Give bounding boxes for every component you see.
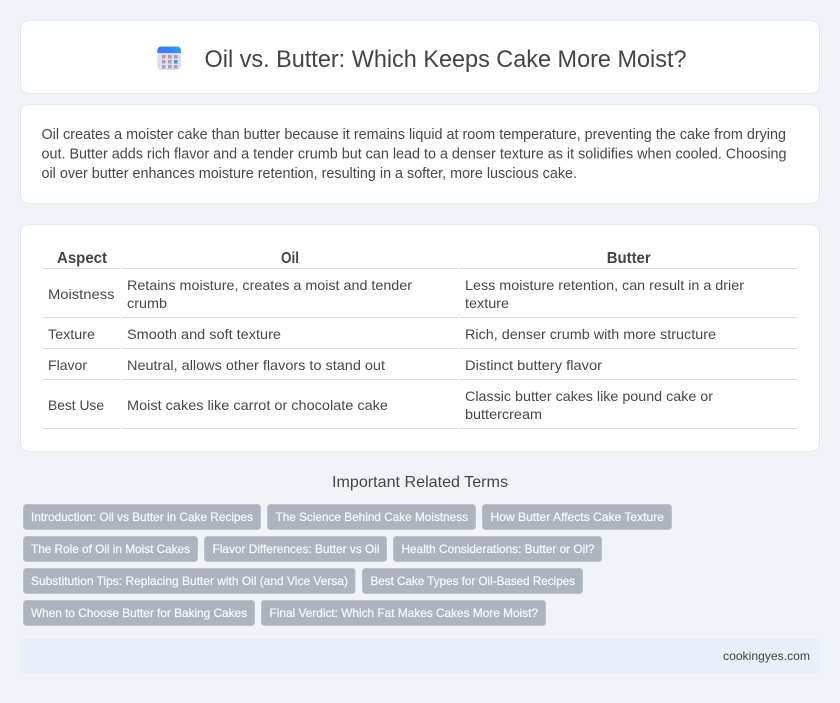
related term tags: When to Choose Butter for Baking Cakes [31, 606, 247, 620]
row: best use: Best Use [48, 397, 104, 413]
panel: title card [20, 20, 820, 94]
related term tags: Flavor Differences: Butter vs Oil [212, 542, 380, 556]
row: best use: Classic butter cakes like pound cake or [465, 388, 713, 404]
related term tags: Substitution Tips: Replacing Butter with Oil (and Vice Versa) [31, 574, 348, 588]
intro paragraph [42, 127, 786, 182]
row: moistness [48, 277, 744, 311]
row: moistness: Less moisture retention, can result in a drier [465, 277, 744, 293]
table header row: Oil [281, 250, 299, 267]
row: flavor: Flavor [48, 357, 87, 373]
row: flavor: Neutral, allows other flavors to stand out [127, 357, 385, 373]
related term tags: The Science Behind Cake Moistness [276, 510, 468, 524]
related term tags [24, 504, 672, 626]
row: moistness: Retains moisture, creates a moist and tender [127, 277, 412, 293]
related term tags: Best Cake Types for Oil-Based Recipes [370, 574, 575, 588]
footer source: cookingyes.com [723, 649, 810, 663]
row: best use: buttercream [465, 406, 542, 422]
row: moistness: texture [465, 295, 509, 311]
row: moistness: crumb [127, 295, 167, 311]
heading: important related terms: Important Related Terms [332, 474, 508, 491]
row: best use [48, 388, 713, 422]
row: texture: Smooth and soft texture [127, 326, 281, 342]
related term tags: How Butter Affects Cake Texture [490, 510, 664, 524]
related term tags: The Role of Oil in Moist Cakes [31, 542, 190, 556]
table header row: Butter [607, 250, 651, 267]
row: texture [48, 326, 716, 342]
panel: comparison table [20, 224, 820, 452]
related term tags: Final Verdict: Which Fat Makes Cakes More Moist? [270, 606, 538, 620]
row: flavor [48, 357, 602, 373]
title: Oil vs. Butter: Which Keeps Cake More Moist? [204, 46, 686, 73]
footer bar [20, 639, 820, 673]
panel: intro text [20, 104, 820, 204]
icon: calendar [157, 46, 181, 70]
row: texture: Rich, denser crumb with more structure [465, 326, 716, 342]
row: best use: Moist cakes like carrot or chocolate cake [127, 397, 388, 413]
table rules [43, 268, 797, 429]
related term tags: Health Considerations: Butter or Oil? [402, 542, 595, 556]
intro paragraph: out. Butter adds rich flavor and a tender crumb but can lead to a denser texture as it solidifies when cooled. Choosing [42, 146, 786, 162]
related term tags: Introduction: Oil vs Butter in Cake Recipes [31, 510, 253, 524]
intro paragraph: Oil creates a moister cake than butter because it remains liquid at room temperature, preventing the cake from drying [42, 127, 786, 143]
row: texture: Texture [48, 326, 95, 342]
table header row: Aspect [57, 250, 108, 267]
row: moistness: Moistness [48, 286, 114, 302]
table header row [57, 250, 651, 267]
row: flavor: Distinct buttery flavor [465, 357, 602, 373]
intro paragraph: oil over butter enhances moisture retention, resulting in a softer, more luscious cake. [42, 166, 577, 182]
